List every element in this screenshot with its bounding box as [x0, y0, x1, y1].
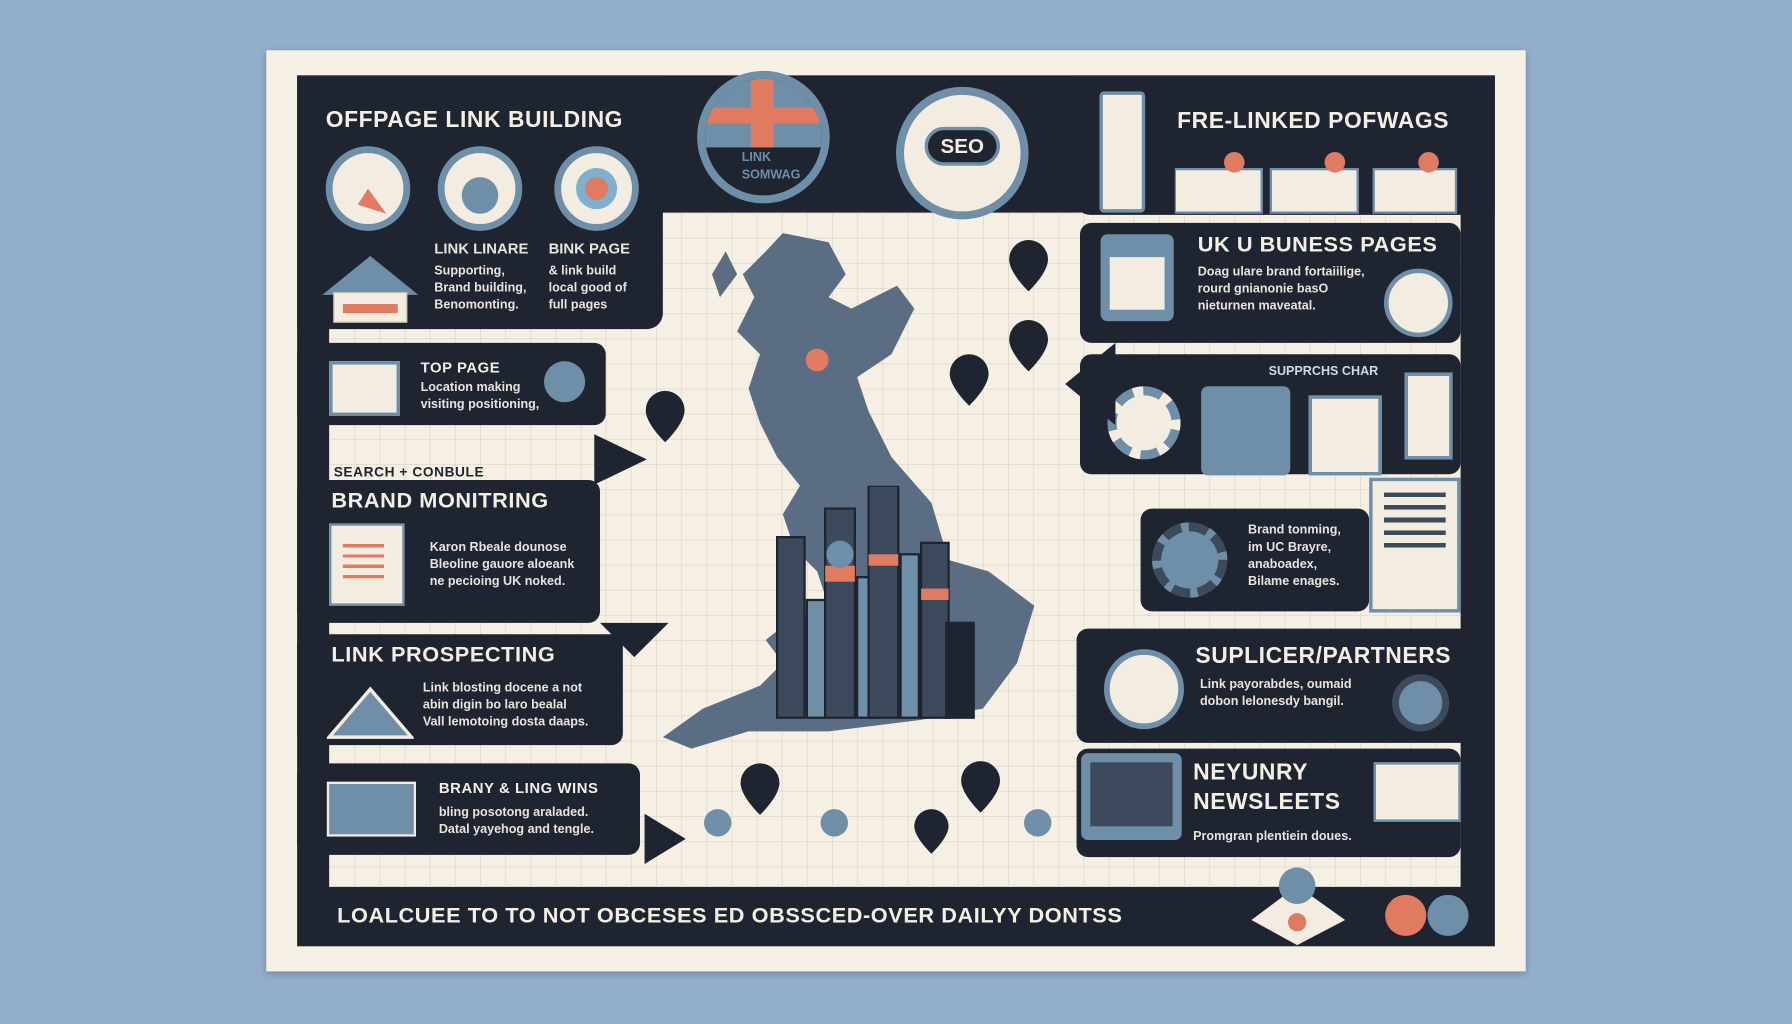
- map pins: [646, 240, 1052, 854]
- arrow: supporting chart notch: [1065, 343, 1115, 425]
- panel: top page: [297, 343, 606, 425]
- panel: UK business pages: [1080, 223, 1461, 343]
- panel: supplier partners: SUPLICER/PARTNERS: [1195, 643, 1451, 669]
- text: link share: full pages: [549, 298, 607, 312]
- top-right dark block: [1074, 75, 1495, 215]
- panel: brand tonming: Bilame enages.: [1248, 575, 1340, 589]
- panel: brand tonming: anaboadex,: [1248, 558, 1317, 571]
- footer text: LOALCUEE TO TO NOT OBCESES ED OBSSCED-OVER DAILYY DONTSS: [337, 904, 1122, 928]
- UK map: [663, 233, 1034, 749]
- panel: brand and link wins: BRANY & LING WINS: [439, 779, 599, 797]
- panel: pre-linked pages: [1099, 91, 1458, 214]
- panel: newsletters: NEYUNRY: [1193, 760, 1308, 785]
- panel: brand and link wins: bling posotong araladed.: [439, 806, 588, 819]
- UK flag circle: SOMWAG: [742, 168, 800, 182]
- panel: supporting chart: [1080, 354, 1461, 474]
- panel: UK business pages: UK U BUNESS PAGES: [1198, 233, 1437, 257]
- panel: link prospecting: Link blosting docene a not: [423, 681, 582, 695]
- panel: brand monitoring: [297, 480, 600, 623]
- panel: UK business pages: Doag ulare brand fortaiilige,: [1198, 265, 1365, 279]
- panel: supplier partners: Link payorabdes, oumaid: [1200, 678, 1352, 691]
- SEO circle: SEO: [941, 135, 984, 158]
- text: link share: local good of: [549, 281, 627, 295]
- panel: brand tonming: im UC Brayre,: [1248, 541, 1331, 554]
- panel: link prospecting: abin digin bo laro bealal: [423, 698, 567, 712]
- panel: link prospecting: Vall lemotoing dosta daaps.: [423, 715, 588, 729]
- panel: UK business pages: nieturnen maveatal.: [1198, 299, 1316, 313]
- frame: [266, 50, 1526, 971]
- panel: newsletters: Promgran plentiein doues.: [1193, 830, 1352, 843]
- bar chart: [776, 486, 975, 719]
- panel: brand monitoring: ne pecioing UK noked.: [430, 575, 565, 589]
- panel: top page: Location making: [421, 381, 520, 394]
- panel: brand and link wins: Datal yayehog and tengle.: [439, 823, 594, 837]
- dark inner board: [297, 75, 1495, 946]
- text: link share: & link build: [549, 264, 616, 278]
- panel: brand and link wins: [297, 763, 640, 855]
- panel: top page: TOP PAGE: [421, 359, 500, 376]
- arrow: wins: [645, 814, 686, 864]
- text: link share: Benomonting.: [434, 298, 519, 312]
- top-center dark block: [663, 75, 1074, 213]
- icon: house: [322, 256, 418, 323]
- panel: pre-linked pages: FRE-LINKED POFWAGS: [1177, 109, 1449, 134]
- panel: brand monitoring: BRAND MONITRING: [331, 489, 549, 513]
- title: OFFPAGE LINK BUILDING: [326, 107, 623, 133]
- subheading: search: SEARCH + CONBULE: [334, 464, 484, 480]
- panel: brand tonming: [1141, 509, 1369, 611]
- SEO circle: [896, 87, 1029, 219]
- panel: brand monitoring: Karon Rbeale dounose: [430, 541, 567, 554]
- panel: newsletters: NEWSLEETS: [1193, 790, 1341, 815]
- panel: brand monitoring: Bleoline gauore aloeank: [430, 558, 574, 571]
- arrow: brand monitoring: [594, 434, 647, 485]
- UK flag circle: LINK: [742, 151, 771, 165]
- panel: UK business pages: rourd gnianonie basO: [1198, 282, 1328, 296]
- text: link share: Brand building,: [434, 281, 526, 295]
- gauges: [326, 146, 639, 231]
- panel: supplier partners: [1077, 629, 1474, 743]
- arrow: link prospecting: [600, 623, 669, 657]
- text: link share: BINK PAGE: [549, 240, 630, 257]
- panel: supporting chart: SUPPRCHS CHAR: [1269, 365, 1378, 378]
- UK flag circle: [697, 71, 830, 203]
- panel: brand tonming: Brand tonming,: [1248, 523, 1341, 537]
- text: link share: LINK LINARE: [434, 240, 528, 257]
- icon: footer pin & circles: [1252, 867, 1469, 945]
- text: link share: [434, 240, 630, 312]
- cream grid area: [329, 213, 1461, 887]
- panel: link prospecting: LINK PROSPECTING: [331, 643, 555, 667]
- top-left dark block: [297, 75, 663, 329]
- panel: supplier partners: dobon lelonesdy bangil.: [1200, 695, 1344, 709]
- panel: newsletters: [1077, 749, 1461, 857]
- panel: top page: visiting positioning,: [421, 398, 539, 411]
- icon: document: [1369, 478, 1461, 613]
- text: link share: Supporting,: [434, 264, 505, 278]
- panel: link prospecting: [297, 634, 623, 745]
